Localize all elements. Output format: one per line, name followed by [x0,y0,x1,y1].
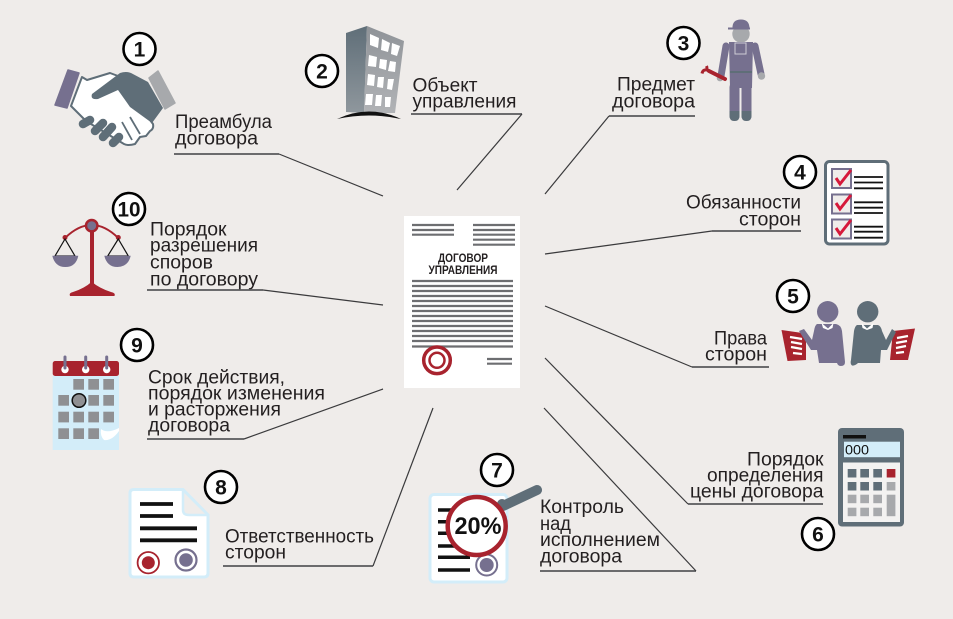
number 1 [124,33,156,65]
leader line [147,290,383,305]
papers [782,328,915,361]
icon: handshake [55,70,175,145]
leader line [545,116,695,194]
icon: document with magnifier [430,490,537,582]
number 2: 2 [316,60,328,84]
number 2 [306,55,338,87]
label: Порядок [747,450,824,470]
label: договора [612,92,695,112]
number 9: 9 [131,334,143,358]
label: и расторжения [148,400,281,420]
label: Права [714,328,767,350]
icon: worker with wrench [702,20,765,121]
icon: scales [52,220,131,296]
label [705,328,767,366]
label: сторон [225,542,286,564]
label: сторон [739,210,801,230]
purple seal [176,550,196,570]
item 8: liability of the parties [130,408,433,577]
label [612,74,695,112]
label [412,76,516,112]
icon: calculator: 000 [845,442,869,458]
number 1: 1 [134,38,146,62]
label [540,497,660,568]
label: Преамбула [175,112,272,133]
number 6 [802,518,834,550]
icon: building [337,26,404,119]
number 9 [121,329,153,361]
number 7 [481,454,513,486]
label: Порядок [150,220,227,240]
magnifier lens: 20% [454,513,502,540]
document title: ДОГОВОР [438,253,488,265]
item 5: rights of the parties [545,280,915,367]
leader line [545,306,769,367]
label: разрешения [150,236,258,256]
leader line [540,408,696,571]
label: над [540,514,571,535]
label: по договору [150,270,259,290]
central document: contract [404,216,520,388]
leader line [223,408,433,566]
number 8 [205,471,237,503]
label: порядок изменения [148,384,325,404]
item 9: term, change, termination [53,329,383,450]
label [686,192,801,230]
magnifier handle [497,490,537,509]
label: Объект [412,76,478,96]
leader line [545,358,823,504]
label [150,220,259,290]
item 10: dispute resolution [52,193,383,305]
document seal [424,347,450,374]
label: споров [150,252,213,274]
item 6: price determination [545,358,904,550]
label: сторон [705,344,767,366]
leader line [411,114,522,190]
number 4 [784,156,816,188]
label: управления [412,92,516,112]
icon: checklist [826,162,888,244]
leader line [545,231,801,254]
label [690,450,824,502]
leader line [174,154,383,196]
red seal [138,552,159,573]
label [175,112,272,150]
label: Предмет [617,74,695,96]
item 2: object of management [306,26,522,190]
number 7: 7 [491,460,503,482]
item 3: subject of contract [545,20,765,194]
label: Обязанности [686,192,801,214]
number 6: 6 [812,524,824,546]
item 4: duties of the parties [545,156,888,254]
icon: two people with documents [782,301,915,366]
document title: УПРАВЛЕНИЯ [428,265,498,277]
number 8: 8 [215,476,227,500]
icon: calculator [838,428,904,526]
label: договора [175,128,258,150]
document title [428,253,498,277]
number 10 [113,193,145,225]
label [225,526,374,564]
label: Срок действия, [148,368,285,388]
label: Контроль [540,497,624,518]
seal [476,554,497,576]
purple person [799,301,845,366]
label: договора [148,416,230,436]
number 5 [777,280,809,312]
number 4: 4 [794,162,806,184]
number 10: 10 [118,198,140,222]
label: цены договора [690,482,824,502]
number 5: 5 [787,286,799,308]
label: определения [707,466,824,486]
number 3 [668,27,700,59]
grey person [851,301,896,366]
leader line [147,389,383,439]
label: исполнением [540,530,660,551]
item 1: preamble [55,33,383,196]
number 3: 3 [678,32,689,56]
label: договора [540,546,622,568]
label: Ответственность [225,526,374,548]
label [148,368,325,436]
icon: calendar [53,357,119,450]
icon: document with seals [130,490,208,577]
item 7: performance control [430,408,696,582]
